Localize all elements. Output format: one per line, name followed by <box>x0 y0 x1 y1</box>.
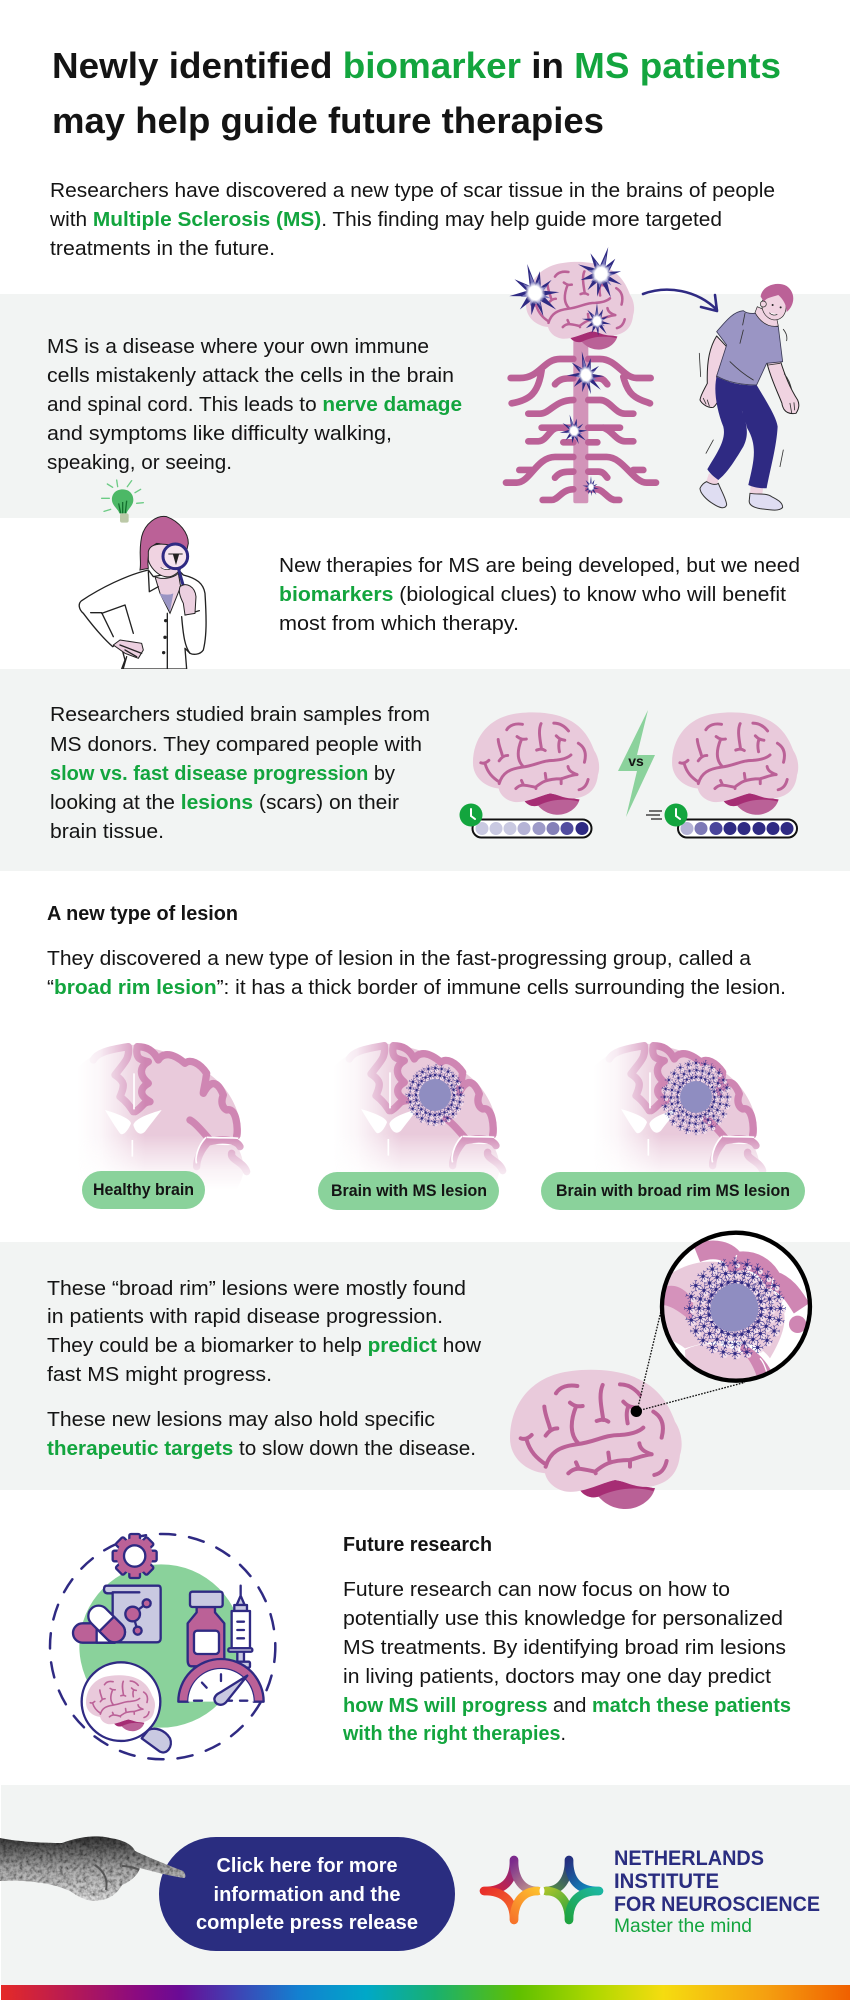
label: healthy brain: Healthy brain <box>93 1181 194 1199</box>
title: Newly identified biomarker in MS patients <box>52 45 781 86</box>
text: study description: looking at the lesions (scars) on their <box>50 791 399 814</box>
logo: Netherlands Institute for Neuroscience <box>484 1847 820 1937</box>
button: press release <box>159 1837 455 1951</box>
text: MS description: MS is a disease where your own immune <box>47 335 429 358</box>
text: biomarker prediction: in patients with rapid disease progression. <box>47 1305 443 1328</box>
text: study description: Researchers studied brain samples from <box>50 703 430 726</box>
icon: magnifying glass with brain <box>82 1662 171 1752</box>
logo wordmark: Master the mind <box>614 1916 752 1937</box>
icon: gear <box>113 1534 157 1578</box>
logo wordmark: INSTITUTE <box>614 1870 719 1893</box>
illustration: scientist with magnifying glass and light bulb <box>79 480 206 669</box>
illustration: brain and spinal cord with lesions <box>502 241 656 503</box>
illustration: fast progression brain <box>646 712 798 838</box>
section: future research <box>50 1534 791 1759</box>
progress bar: fast <box>678 820 797 838</box>
icon: clock slow <box>460 804 482 826</box>
text: future research: Future research can now focus on how to <box>343 1578 730 1601</box>
illustration: brain with MS lesion <box>311 1044 503 1210</box>
text: study description: slow vs. fast disease progression by <box>50 762 396 785</box>
text: broad rim lesion: They discovered a new type of lesion in the fast-progressing group, called a <box>47 947 752 970</box>
text: biomarker prediction: They could be a biomarker to help predict how <box>47 1334 481 1357</box>
rainbow footer bar <box>1 1985 850 2000</box>
icon: gauge <box>178 1659 264 1705</box>
label: brain with broad rim lesion: Brain with broad rim MS lesion <box>556 1182 790 1200</box>
button: press release: complete press release <box>196 1912 418 1934</box>
panel: broad rim as biomarker <box>0 1233 850 1509</box>
intro text block: Researchers have discovered a new type of scar tissue in the brains of people <box>50 179 775 202</box>
callout: dotted connector lines <box>631 1308 745 1417</box>
icon: vs lightning bolt <box>618 710 655 817</box>
panel: what is MS <box>0 241 850 518</box>
panel: study comparison <box>0 669 850 871</box>
panel: footer call to action <box>0 1785 850 1985</box>
logo wordmark: NETHERLANDS <box>614 1847 764 1870</box>
icon: small brain in magnifier <box>86 1675 155 1731</box>
text: MS description: and spinal cord. This leads to nerve damage <box>47 393 462 416</box>
logo mark <box>484 1860 599 1920</box>
button: press release: Click here for more <box>216 1855 398 1877</box>
label: brain with broad rim lesion <box>541 1172 805 1210</box>
callout: magnified broad rim lesion <box>660 1233 810 1385</box>
icon: syringe <box>228 1586 252 1668</box>
progress bar: slow <box>472 820 592 838</box>
text: biomarker prediction: fast MS might progress. <box>47 1363 272 1386</box>
button: press release: information and the <box>214 1884 400 1906</box>
title: may help guide future therapies <box>52 100 604 141</box>
logo wordmark <box>614 1847 820 1937</box>
illustration: healthy brain <box>55 1045 247 1209</box>
text: future research: with the right therapies. <box>342 1722 566 1745</box>
intro text block: treatments in the future. <box>50 237 275 260</box>
text: study description: brain tissue. <box>50 820 164 843</box>
icon: vs lightning bolt: vs <box>628 753 644 769</box>
text: broad rim lesion: “broad rim lesion”: it has a thick border of immune cells surrounding the lesion. <box>47 976 786 999</box>
text: future research: MS treatments. By identifying broad rim lesions <box>343 1636 786 1659</box>
section: new type of lesion <box>47 903 805 1210</box>
heading: A new type of lesion <box>47 903 238 925</box>
panel: need for biomarkers <box>79 480 800 669</box>
illustration: person with symptoms <box>699 284 799 510</box>
icon: clock fast <box>646 804 688 826</box>
text: MS description <box>47 335 462 474</box>
intro text block: with Multiple Sclerosis (MS). This finding may help guide more targeted <box>49 208 722 231</box>
text: study description <box>50 703 430 843</box>
illustration: research and therapy icons <box>50 1534 275 1759</box>
intro text block <box>49 179 775 260</box>
text: future research: potentially use this knowledge for personalized <box>343 1607 783 1630</box>
illustration: brain with magnified lesion <box>510 1233 810 1509</box>
text: biomarker prediction <box>47 1277 481 1460</box>
text: biomarker prediction: These “broad rim” lesions were mostly found <box>47 1277 466 1300</box>
illustration: slow progression brain <box>460 712 599 838</box>
text: broad rim lesion <box>47 947 786 999</box>
icon: beaker with molecule and capsules <box>73 1586 161 1647</box>
illustration: brain with broad rim lesion <box>541 1044 805 1210</box>
label: healthy brain <box>82 1171 205 1209</box>
text: future research <box>342 1578 791 1745</box>
text: study description: MS donors. They compared people with <box>50 733 422 756</box>
heading: Future research <box>343 1534 492 1556</box>
logo wordmark: FOR NEUROSCIENCE <box>614 1893 820 1916</box>
label: brain with MS lesion <box>318 1172 499 1210</box>
text: biomarker prediction: therapeutic targets to slow down the disease. <box>47 1437 476 1460</box>
dashed ring <box>50 1534 275 1759</box>
label: brain with MS lesion: Brain with MS lesion <box>331 1182 487 1200</box>
text: biomarkers: most from which therapy. <box>279 612 519 635</box>
text: future research: how MS will progress and match these patients <box>343 1694 791 1717</box>
title <box>52 45 781 141</box>
icon: light bulb <box>102 480 143 523</box>
icon: pointing hand <box>0 1836 185 1901</box>
arrow: from brain to patient <box>643 290 717 311</box>
text: MS description: speaking, or seeing. <box>47 451 232 474</box>
text: biomarkers: New therapies for MS are being developed, but we need <box>279 554 800 577</box>
text: biomarker prediction: These new lesions may also hold specific <box>47 1408 435 1431</box>
icon: vial <box>188 1592 224 1666</box>
text: MS description: and symptoms like difficulty walking, <box>47 422 392 445</box>
text: MS description: cells mistakenly attack the cells in the brain <box>47 364 454 387</box>
text: biomarkers: biomarkers (biological clues) to know who will benefit <box>279 583 786 606</box>
text: biomarkers <box>279 554 800 635</box>
text: future research: in living patients, doctors may one day predict <box>343 1665 771 1688</box>
